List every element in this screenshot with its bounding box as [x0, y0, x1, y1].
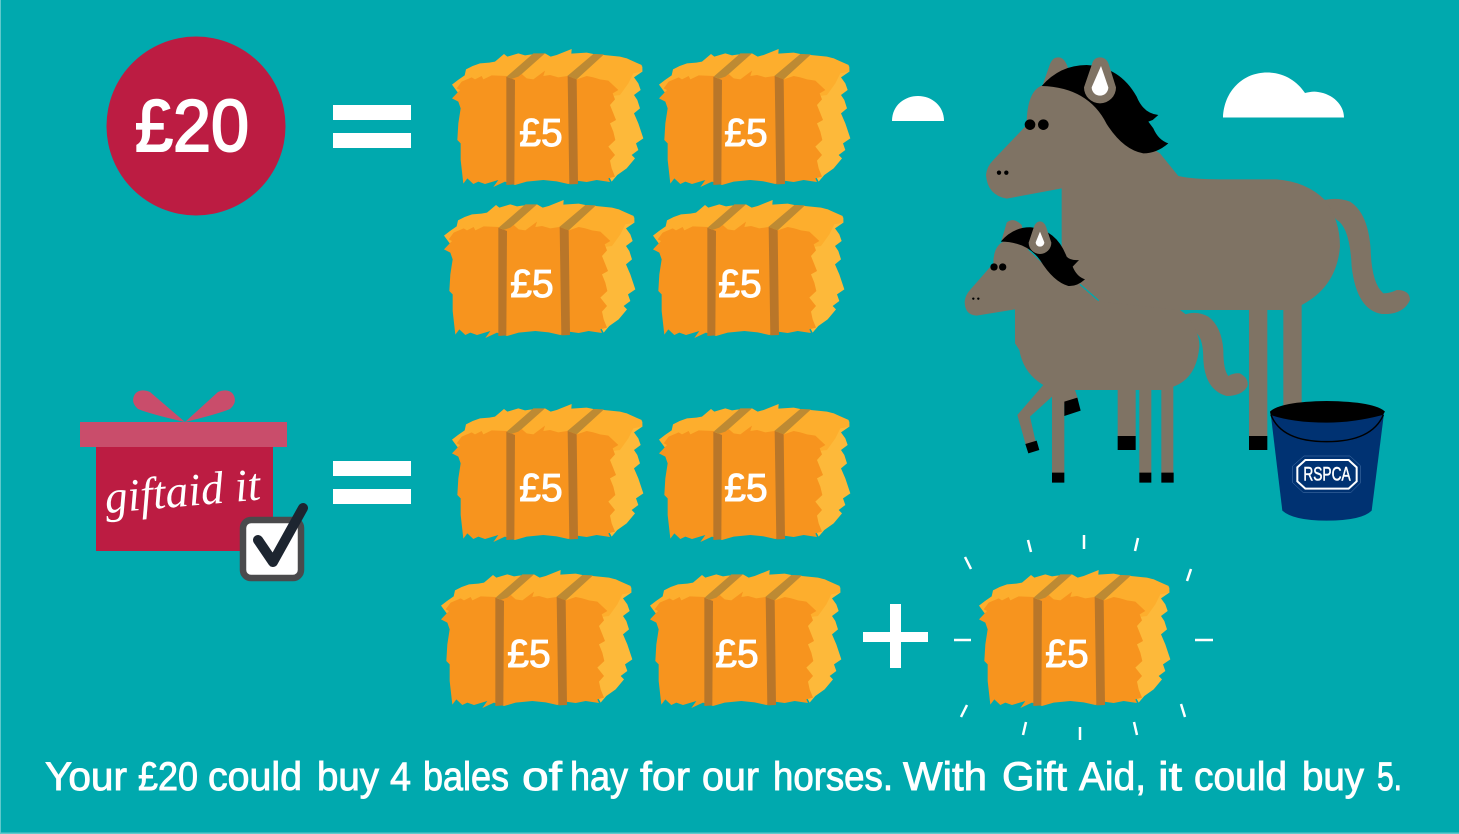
caption: for	[640, 755, 690, 799]
large horse tail	[1322, 199, 1410, 314]
large horse nostrils	[997, 170, 1008, 175]
caption: £20	[138, 755, 198, 799]
caption: of	[522, 755, 563, 799]
caption: could	[1194, 755, 1287, 799]
foal body	[965, 220, 1199, 473]
foal ear drop	[1036, 232, 1044, 247]
small cloud	[892, 96, 944, 121]
caption: Your	[45, 755, 127, 799]
caption: With	[903, 755, 987, 799]
giftaid it logotype: giftaid it	[102, 458, 263, 523]
extra Gift Aid hay bale: £5	[1045, 633, 1089, 676]
hay bale 2	[659, 49, 850, 187]
caption: it	[1158, 755, 1182, 799]
hay bale 3	[444, 200, 635, 338]
caption: our	[702, 755, 759, 799]
hay bale 8: £5	[715, 633, 759, 676]
large horse front ear	[1084, 57, 1116, 103]
hay bale 7: £5	[507, 633, 551, 676]
plus sign	[863, 604, 928, 668]
foal tail	[1183, 313, 1248, 396]
hay bale 4	[653, 200, 844, 338]
caption	[45, 755, 1402, 799]
Gift Aid present	[80, 390, 303, 578]
caption: Gift	[1002, 755, 1067, 799]
large horse eyes	[1025, 119, 1049, 130]
foal neck gap	[1080, 284, 1099, 301]
hay bale 3: £5	[510, 263, 554, 306]
caption: bales	[423, 755, 509, 799]
equals sign: bottom row	[333, 461, 411, 504]
equals sign: top row	[333, 105, 411, 148]
sparkle rays	[954, 535, 1213, 740]
bucket body	[1271, 413, 1384, 521]
£20 donation circle: £20	[135, 86, 249, 167]
foal	[965, 220, 1248, 483]
caption: buy	[1302, 755, 1364, 799]
foal eyes	[990, 263, 1006, 271]
hay bale 1: £5	[519, 112, 563, 155]
foal nostrils	[972, 297, 979, 300]
bucket	[1270, 401, 1385, 521]
hay bale 1	[452, 49, 643, 187]
check mark	[258, 508, 303, 562]
caption: 4	[390, 755, 411, 799]
caption: could	[208, 755, 302, 799]
present bow	[133, 390, 235, 422]
large cloud	[1223, 72, 1344, 118]
£20 donation circle	[106, 36, 286, 216]
hay bale 4: £5	[718, 263, 762, 306]
bucket handle	[1271, 415, 1383, 442]
foal front ear	[1029, 221, 1051, 254]
large horse ear drop	[1092, 66, 1108, 96]
hay bale 6	[659, 404, 850, 542]
caption: hay	[570, 755, 628, 799]
hay bale 2: £5	[724, 112, 768, 155]
caption: Aid,	[1079, 755, 1146, 799]
large horse hooves	[1249, 436, 1267, 450]
large horse mane	[1042, 65, 1168, 153]
large horse	[986, 57, 1410, 450]
hay bale 6: £5	[724, 467, 768, 510]
hay bale 5: £5	[519, 467, 563, 510]
foal mane	[1001, 227, 1085, 286]
caption: horses.	[773, 755, 893, 799]
present lid	[80, 422, 287, 447]
caption: 5.	[1377, 755, 1402, 799]
present box	[96, 447, 273, 551]
illustration: horses and bucket	[965, 57, 1410, 521]
caption: buy	[317, 755, 379, 799]
bucket interior	[1270, 401, 1385, 423]
checkbox	[243, 520, 301, 578]
extra Gift Aid hay bale	[979, 570, 1170, 708]
large horse body	[986, 80, 1340, 437]
large horse back ear	[1043, 57, 1070, 85]
hay bale 7	[441, 570, 632, 708]
hay bale 5	[452, 404, 643, 542]
foal hooves	[1025, 398, 1174, 483]
RSPCA logo: RSPCA	[1303, 465, 1351, 486]
hay bale 8	[650, 570, 841, 708]
